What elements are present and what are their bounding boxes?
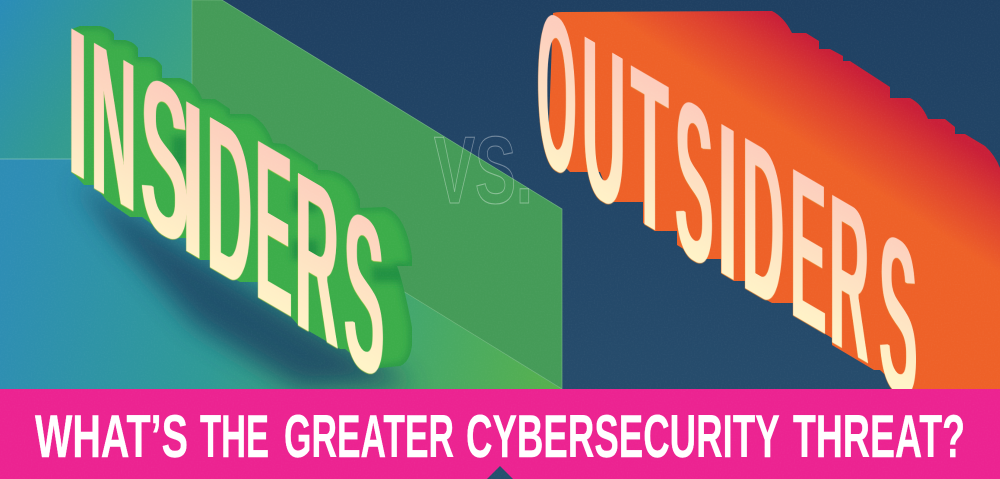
back wall bbox=[0, 0, 193, 159]
OUTSIDERS faces: I bbox=[717, 73, 738, 332]
pointer triangle bbox=[487, 466, 513, 479]
green wall plane bbox=[192, 0, 562, 389]
green silhouette bbox=[72, 26, 412, 369]
letter shadow on floor bbox=[75, 180, 415, 389]
OUTSIDERS faces: D bbox=[742, 87, 784, 361]
title: CYBERSECURITY bbox=[466, 403, 780, 470]
INSIDERS faces: N bbox=[91, 0, 137, 262]
OUTSIDERS faces: S bbox=[675, 45, 713, 320]
title: WHAT’S bbox=[35, 403, 188, 470]
INSIDERS faces: S bbox=[140, 22, 189, 297]
OUTSIDERS faces: E bbox=[790, 120, 826, 383]
OUTSIDERS faces: S bbox=[879, 181, 917, 453]
INSIDERS faces: R bbox=[295, 120, 339, 399]
INSIDERS faces: S bbox=[344, 158, 384, 431]
INSIDERS faces: D bbox=[207, 66, 252, 342]
pink title banner bbox=[0, 389, 1000, 479]
OUTSIDERS faces: R bbox=[829, 143, 869, 413]
title: GREATER bbox=[284, 403, 454, 470]
panel: insiders room bbox=[0, 0, 562, 389]
insiders extrusion bbox=[72, 26, 412, 369]
OUTSIDERS faces: T bbox=[631, 14, 669, 288]
title: THE bbox=[200, 403, 269, 470]
outsiders extrusion bbox=[548, 11, 1000, 389]
floor edge highlight bbox=[0, 158, 192, 160]
dark edge shading bbox=[72, 26, 412, 369]
VS. outline label: VS. bbox=[434, 117, 533, 224]
banner background bbox=[0, 389, 1000, 479]
floor bbox=[0, 159, 562, 389]
INSIDERS faces: E bbox=[255, 86, 292, 369]
ledge shadows bbox=[172, 136, 406, 282]
INSIDERS faces: I bbox=[182, 49, 204, 311]
